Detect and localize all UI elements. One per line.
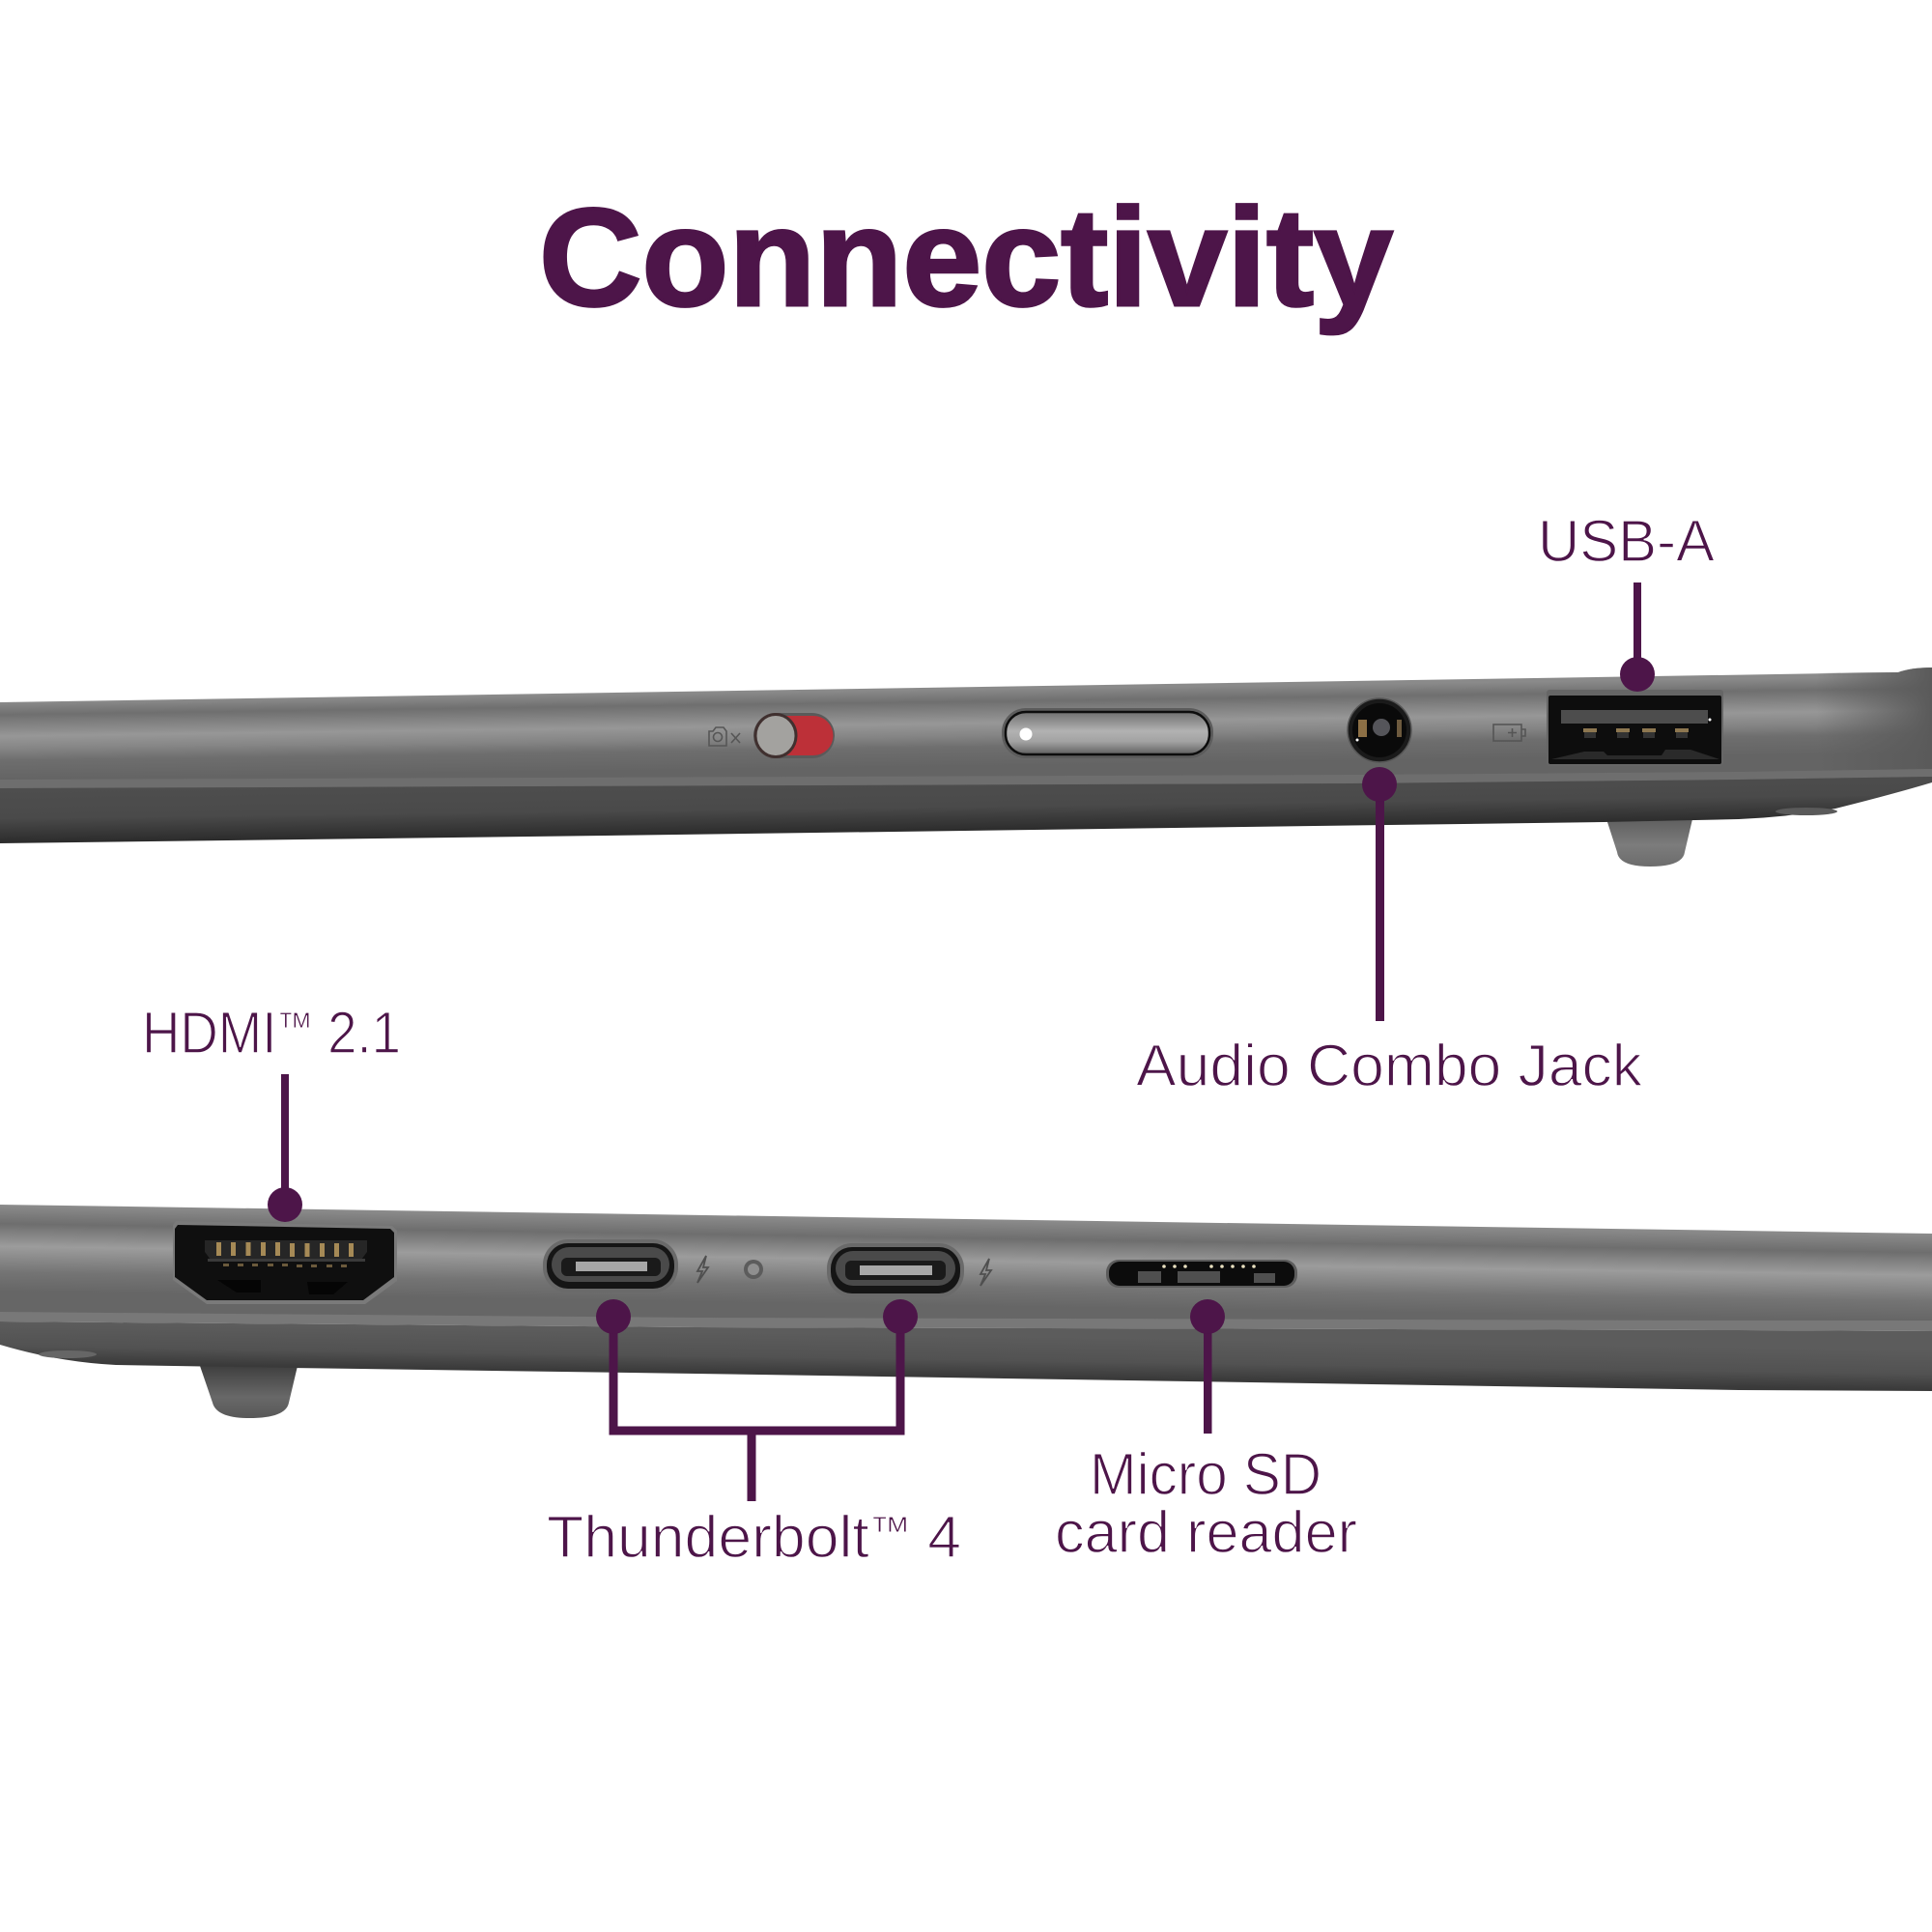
status LED ring — [744, 1260, 763, 1279]
panel: laptop left side — [0, 1205, 1932, 1418]
panel: laptop right side — [0, 668, 1932, 867]
audio combo jack port — [1348, 698, 1411, 762]
Micro SD card slot — [1106, 1260, 1297, 1288]
callout: HDMI 2.1: ™ — [276, 1004, 313, 1049]
icon: thunderbolt, first — [697, 1256, 708, 1283]
callout: HDMI 2.1 — [142, 1000, 401, 1222]
HDMI port — [173, 1221, 397, 1304]
laptop body, right side — [0, 668, 1932, 843]
callout: USB-A — [1538, 508, 1715, 692]
icon: camera shutter — [709, 727, 740, 746]
Thunderbolt 4 port, second — [827, 1243, 964, 1297]
callout: Micro SD card reader: card reader — [1055, 1499, 1357, 1565]
callout: Thunderbolt 4: ™ — [869, 1508, 911, 1553]
camera privacy switch — [753, 713, 835, 758]
callout: HDMI 2.1: HDMI — [142, 1000, 293, 1065]
callout: Micro SD card reader: Micro SD — [1090, 1441, 1321, 1507]
callout: Micro SD card reader — [1055, 1299, 1357, 1565]
callout: HDMI 2.1: 2.1 — [313, 1000, 401, 1065]
callout: Thunderbolt 4 — [547, 1299, 961, 1570]
title: Connectivity — [539, 180, 1393, 335]
USB-A port — [1547, 690, 1723, 766]
callout: Audio Combo Jack — [1136, 767, 1643, 1098]
callout: Thunderbolt 4: 4 — [911, 1504, 961, 1570]
icon: battery charge — [1493, 724, 1525, 741]
laptop body, left side — [0, 1205, 1932, 1391]
callout: Thunderbolt 4: Thunderbolt — [547, 1504, 862, 1570]
rubber foot, right side — [1606, 819, 1692, 867]
callout: USB-A: USB-A — [1538, 508, 1715, 574]
icon: thunderbolt, second — [980, 1259, 991, 1286]
Thunderbolt 4 port, first — [543, 1239, 678, 1293]
power button — [1002, 708, 1213, 758]
callout: Audio Combo Jack: Audio Combo Jack — [1136, 1033, 1643, 1098]
rubber foot, left side — [200, 1366, 298, 1418]
